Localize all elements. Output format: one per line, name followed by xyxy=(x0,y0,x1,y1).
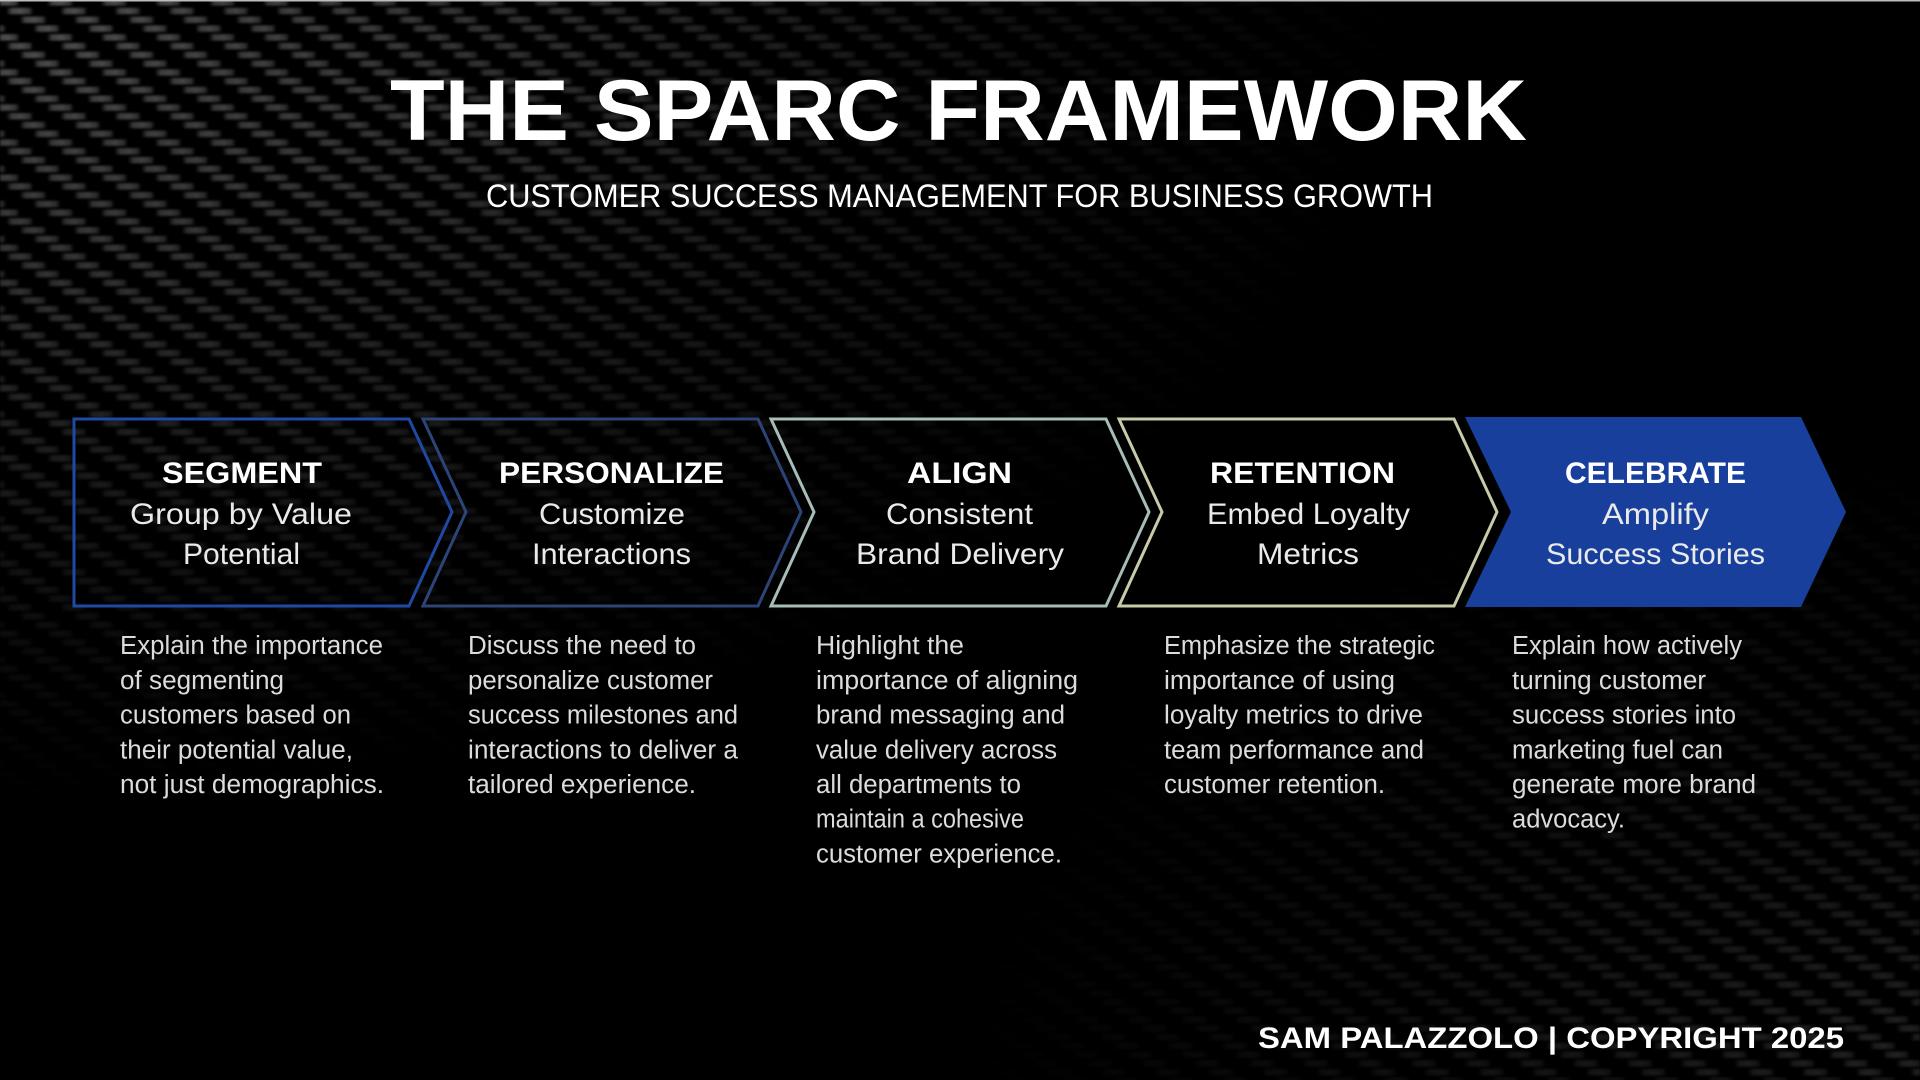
chevron: segment xyxy=(74,419,452,606)
chevron: personalize xyxy=(423,419,801,606)
subheading: celebrate: Amplify xyxy=(1602,498,1709,531)
description: celebrate xyxy=(1512,632,1756,834)
description: celebrate: success stories into xyxy=(1512,702,1736,730)
description: personalize: personalize customer xyxy=(468,667,714,695)
subheading: retention: Metrics xyxy=(1257,538,1359,571)
subheading: retention: Embed Loyalty xyxy=(1207,498,1410,531)
description: align: maintain a cohesive xyxy=(816,806,1024,834)
subheading: retention xyxy=(1207,498,1410,571)
description: segment: Explain the importance xyxy=(120,632,383,660)
description: segment xyxy=(120,632,384,799)
panel: align xyxy=(771,419,1149,868)
description: celebrate: marketing fuel can xyxy=(1512,736,1723,764)
description: retention xyxy=(1164,632,1435,799)
description: personalize xyxy=(468,632,739,799)
subheading: align: Brand Delivery xyxy=(856,538,1064,571)
description: retention: importance of using xyxy=(1164,667,1395,695)
panel: retention xyxy=(1119,419,1497,799)
subheading: segment: Group by Value xyxy=(130,498,352,531)
subheading: celebrate xyxy=(1546,498,1765,571)
description: align: customer experience. xyxy=(816,840,1062,868)
description: align: all departments to xyxy=(816,771,1021,799)
description: celebrate: advocacy. xyxy=(1512,806,1625,834)
heading: align: ALIGN xyxy=(907,457,1012,490)
chevron: celebrate xyxy=(1465,417,1846,607)
subheading: personalize: Customize xyxy=(539,498,685,531)
subheading: personalize xyxy=(532,498,691,571)
heading: celebrate: CELEBRATE xyxy=(1565,457,1746,490)
heading: segment: SEGMENT xyxy=(162,457,322,490)
subheading: segment xyxy=(130,498,352,571)
description: personalize: Discuss the need to xyxy=(468,632,696,660)
title: THE SPARC FRAMEWORK xyxy=(390,63,1527,159)
description: align xyxy=(816,632,1078,868)
description: celebrate: Explain how actively xyxy=(1512,632,1742,660)
description: personalize: success milestones and xyxy=(468,702,738,730)
description: align: brand messaging and xyxy=(816,702,1065,730)
chevron: align xyxy=(771,419,1149,606)
description: segment: their potential value, xyxy=(120,736,353,764)
description: segment: of segmenting xyxy=(120,667,284,695)
description: segment: not just demographics. xyxy=(120,771,384,799)
subheading: celebrate: Success Stories xyxy=(1546,538,1765,571)
description: retention: customer retention. xyxy=(1164,771,1385,799)
footer: copyright: SAM PALAZZOLO | COPYRIGHT 2025 xyxy=(1258,1022,1844,1055)
description: segment: customers based on xyxy=(120,702,351,730)
chevron: retention xyxy=(1119,419,1497,606)
subheading: personalize: Interactions xyxy=(532,538,691,571)
heading: personalize: PERSONALIZE xyxy=(499,457,724,490)
panel: segment xyxy=(74,419,452,799)
description: celebrate: turning customer xyxy=(1512,667,1707,695)
description: celebrate: generate more brand xyxy=(1512,771,1756,799)
panel: personalize xyxy=(423,419,801,799)
subheading: align: Consistent xyxy=(886,498,1034,531)
description: retention: team performance and xyxy=(1164,736,1424,764)
description: align: value delivery across xyxy=(816,736,1057,764)
description: align: Highlight the xyxy=(816,632,964,660)
subtitle: CUSTOMER SUCCESS MANAGEMENT FOR BUSINESS GROWTH xyxy=(486,178,1433,214)
panel: celebrate xyxy=(1465,417,1846,834)
description: personalize: tailored experience. xyxy=(468,771,696,799)
description: retention: Emphasize the strategic xyxy=(1164,632,1435,660)
description: personalize: interactions to deliver a xyxy=(468,736,739,764)
description: retention: loyalty metrics to drive xyxy=(1164,702,1423,730)
description: align: importance of aligning xyxy=(816,667,1078,695)
subheading: align xyxy=(856,498,1064,571)
subheading: segment: Potential xyxy=(183,538,300,571)
heading: retention: RETENTION xyxy=(1210,457,1395,490)
